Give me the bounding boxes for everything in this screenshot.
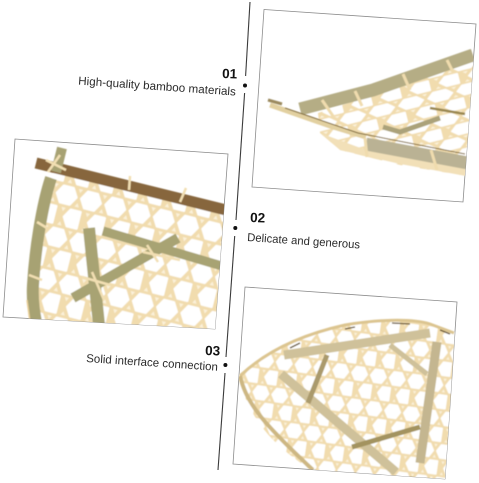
feature 02 label: Delicate and generous (247, 232, 361, 251)
weave (318, 62, 474, 176)
feature 03 label: 03 (205, 343, 221, 359)
bindings (322, 60, 453, 170)
upper rim band (300, 55, 473, 109)
lower fringe (320, 133, 466, 176)
bindings (29, 155, 186, 300)
bamboo strips (281, 333, 437, 472)
rim tip and dark edges (268, 100, 465, 154)
panel: left basket corner photo (3, 139, 228, 330)
feature 01 label: 01 (222, 66, 238, 82)
top dark rim (36, 163, 226, 210)
panel: top right basket rim photo (252, 10, 476, 202)
feature 02 label: 02 (250, 210, 265, 226)
corner post (56, 148, 62, 172)
outer rim (240, 320, 454, 376)
panel: bottom right basket photo (233, 287, 457, 480)
feature 01 label: High-quality bamboo materials (78, 76, 236, 99)
weave (32, 170, 228, 330)
divider line (218, 2, 250, 470)
weave (238, 320, 455, 480)
marker dots (223, 84, 247, 367)
lower rim band (366, 144, 468, 163)
feature 03 label: Solid interface connection (86, 353, 218, 374)
bamboo strips (73, 228, 222, 325)
feature 01 label (78, 66, 238, 99)
feature 03 label (86, 343, 221, 374)
left rim band (240, 376, 313, 470)
left curved band (33, 178, 51, 322)
feature 02 label (247, 210, 361, 251)
